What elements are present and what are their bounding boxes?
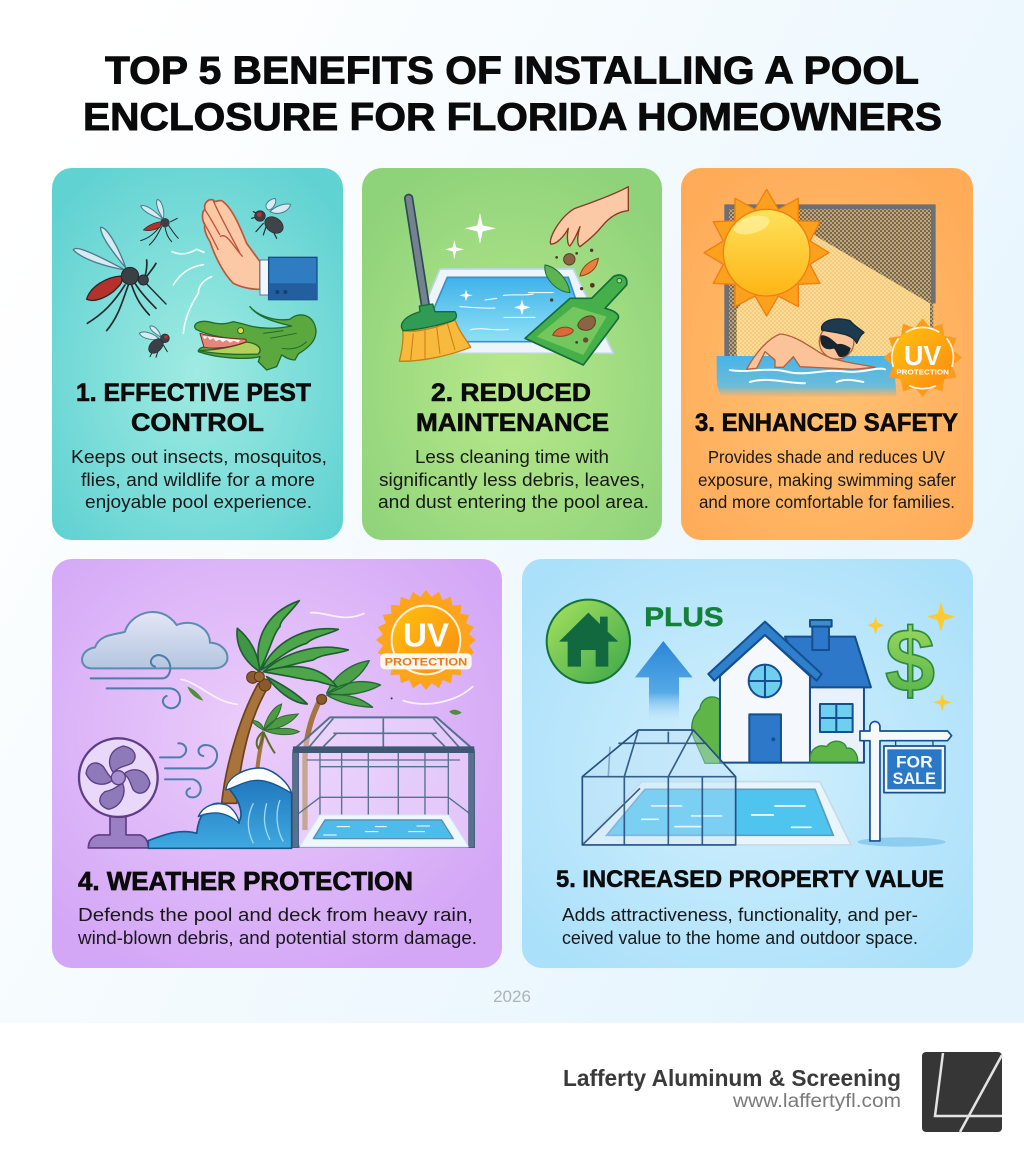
body text: Provides shade and reduces UV bbox=[708, 447, 945, 467]
flying leaves bbox=[187, 687, 462, 715]
panel background teal bbox=[52, 168, 343, 540]
year label: 2026 bbox=[493, 987, 531, 1006]
illustration: broom, pool and dustpan bbox=[399, 187, 628, 365]
body text: wind-blown debris, and potential storm damage. bbox=[77, 928, 477, 948]
body text: flies, and wildlife for a more bbox=[81, 470, 315, 490]
PLUS label: PLUS bbox=[644, 602, 724, 632]
screen frame bbox=[727, 207, 933, 360]
sun bbox=[704, 189, 829, 316]
body text: and dust entering the pool area. bbox=[378, 492, 649, 512]
pool bbox=[582, 782, 851, 845]
panel: weather protection bbox=[52, 559, 502, 968]
title: ENCLOSURE FOR FLORIDA HOMEOWNERS bbox=[83, 96, 942, 139]
large mosquito bbox=[73, 227, 166, 331]
panel background orange bbox=[681, 168, 973, 540]
UV protection badge: UV bbox=[403, 618, 449, 655]
footer band bbox=[0, 1023, 1024, 1154]
footer url: www.laffertyfl.com bbox=[732, 1091, 901, 1112]
for sale sign: SALE bbox=[893, 769, 936, 788]
body text: and more comfortable for families. bbox=[699, 492, 955, 512]
storm cloud bbox=[82, 612, 227, 668]
house bbox=[708, 620, 871, 763]
panel: enhanced safety bbox=[681, 168, 973, 540]
body text: significantly less debris, leaves, bbox=[379, 470, 645, 490]
heading bbox=[416, 379, 609, 437]
heading: 5. INCREASED PROPERTY VALUE bbox=[556, 866, 944, 893]
footer brand name: Lafferty Aluminum & Screening bbox=[563, 1065, 901, 1091]
body text bbox=[378, 447, 649, 512]
panel: increased property value bbox=[522, 559, 973, 968]
body text: ceived value to the home and outdoor space. bbox=[562, 928, 918, 948]
white gust lines bbox=[181, 613, 473, 704]
heading: 3. ENHANCED SAFETY bbox=[695, 409, 958, 437]
fan bbox=[79, 738, 158, 848]
for sale sign bbox=[858, 721, 952, 847]
illustration: pests and alligator blocked by hand bbox=[73, 198, 317, 370]
body text: enjoyable pool experience. bbox=[85, 492, 312, 512]
illustration: storm, palm trees, wave and enclosure bbox=[79, 579, 487, 848]
body text bbox=[562, 905, 918, 948]
illustration: sun, screen and swimmer bbox=[704, 189, 962, 397]
heading bbox=[76, 379, 311, 437]
small palm bbox=[252, 704, 299, 770]
dustpan bbox=[525, 275, 627, 365]
dirt and leaves in dustpan bbox=[553, 316, 595, 344]
alligator bbox=[195, 307, 316, 370]
logo bbox=[922, 1052, 1002, 1132]
main palm bbox=[222, 601, 348, 803]
panel background purple bbox=[52, 559, 502, 968]
body text: exposure, making swimming safer bbox=[698, 470, 956, 490]
sleeve bbox=[269, 257, 317, 300]
title bbox=[83, 50, 942, 139]
body text: Adds attractiveness, functionality, and per- bbox=[562, 905, 918, 925]
panel background blue bbox=[522, 559, 973, 968]
gold sparkles bbox=[868, 602, 955, 711]
panel background green bbox=[362, 168, 662, 540]
body text bbox=[71, 447, 327, 512]
body text bbox=[698, 447, 956, 512]
body text: Less cleaning time with bbox=[415, 447, 609, 467]
UV protection badge bbox=[883, 318, 962, 397]
second palm bbox=[305, 661, 381, 830]
sparkles bbox=[445, 213, 531, 315]
illustration: house, enclosure, for sale sign bbox=[547, 600, 955, 847]
screen enclosure bbox=[293, 717, 475, 848]
heading: 2. REDUCED bbox=[431, 379, 591, 407]
panel: effective pest control bbox=[52, 168, 343, 540]
pool bbox=[427, 269, 613, 353]
bushes bbox=[692, 697, 722, 763]
body text bbox=[77, 905, 477, 948]
heading: CONTROL bbox=[131, 409, 264, 437]
falling debris bbox=[545, 249, 598, 302]
dollar sign: $ bbox=[885, 612, 935, 712]
water bbox=[717, 356, 897, 397]
body text: Keeps out insects, mosquitos, bbox=[71, 447, 327, 467]
broom bbox=[399, 198, 471, 361]
title: TOP 5 BENEFITS OF INSTALLING A POOL bbox=[105, 50, 919, 92]
panel: reduced maintenance bbox=[362, 168, 662, 540]
small mosquito bbox=[141, 199, 178, 245]
fly bottom left bbox=[139, 326, 169, 357]
wind lines bbox=[91, 655, 217, 797]
UV protection badge: UV bbox=[904, 340, 942, 371]
screen enclosure bbox=[582, 730, 736, 845]
UV protection badge: PROTECTION bbox=[385, 656, 467, 668]
heading: MAINTENANCE bbox=[416, 409, 609, 437]
UV protection badge bbox=[365, 579, 487, 701]
green house badge bbox=[547, 600, 630, 683]
swimmer bbox=[747, 319, 875, 369]
hand bbox=[202, 200, 260, 289]
UV protection badge: PROTECTION bbox=[896, 369, 949, 376]
wind swoosh lines bbox=[172, 249, 212, 333]
heading: 1. EFFECTIVE PEST bbox=[76, 379, 311, 407]
body text: Defends the pool and deck from heavy rain, bbox=[78, 905, 473, 925]
up arrow bbox=[635, 641, 693, 720]
finger creases bbox=[205, 201, 243, 257]
fly top right bbox=[252, 198, 291, 238]
heading: 4. WEATHER PROTECTION bbox=[78, 868, 413, 896]
ocean wave bbox=[148, 768, 292, 848]
for sale sign: FOR bbox=[896, 752, 933, 771]
hand dropping debris bbox=[550, 187, 628, 247]
shirt cuff bbox=[260, 260, 269, 295]
